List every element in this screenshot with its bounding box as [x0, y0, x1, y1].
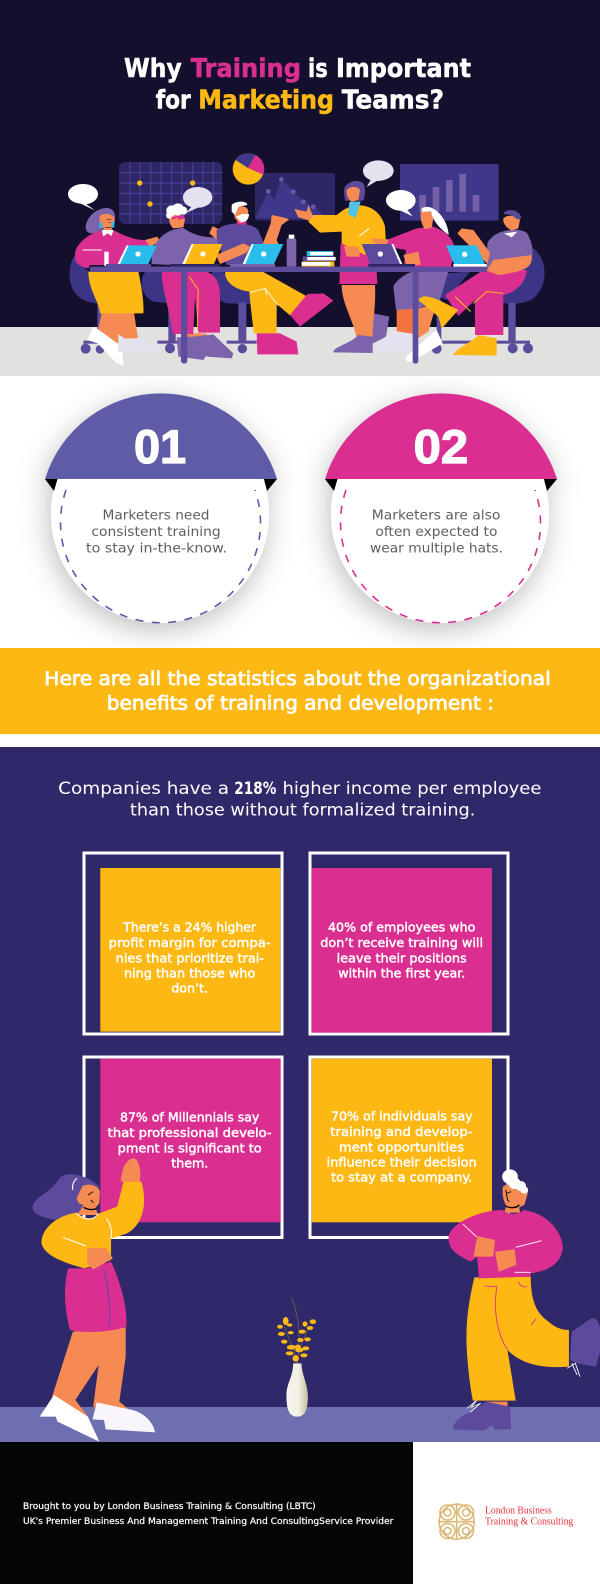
text: point 01: Marketers need	[102, 508, 210, 523]
stat card: 40% of employees: within the first year.	[338, 966, 465, 981]
text: point 02	[370, 508, 503, 557]
panel: header background	[0, 0, 600, 328]
card shadow and body	[45, 393, 277, 623]
banner: Here are all the statistics about the organizational	[44, 669, 551, 690]
panel: point 02	[325, 393, 557, 623]
pie chart	[233, 153, 264, 185]
person: standing presenter in yellow	[294, 181, 389, 353]
intro statement: higher income per employee	[282, 779, 541, 798]
logo: company name: Training & Consulting	[485, 1516, 573, 1528]
logo: company name: London Business	[485, 1505, 552, 1516]
laptops	[106, 244, 487, 267]
stat card: 70% of individuals	[310, 1057, 508, 1238]
title: Marketing	[198, 85, 334, 115]
chart screen: mountain line	[255, 173, 335, 220]
text: point 02: often expected to	[375, 525, 497, 540]
stat card: 87% of Millennials	[84, 1057, 282, 1238]
title: for	[156, 85, 191, 115]
stat card: 70% of individuals: to stay at a company.	[331, 1170, 472, 1185]
meeting table	[90, 267, 487, 364]
stat card: 87% of Millennials: pment is significant to	[118, 1140, 262, 1155]
footer: white logo panel	[413, 1442, 600, 1584]
footer credit text: Brought to you by London Business Training & Consulting (LBTC)	[23, 1501, 316, 1511]
text: point 02: wear multiple hats.	[370, 542, 503, 557]
text: point 01	[86, 508, 227, 557]
stat card: 40% of employees	[310, 853, 508, 1034]
vase with yellow plant	[277, 1298, 316, 1417]
stat card: 87% of Millennials: them.	[171, 1155, 208, 1170]
footer credit text	[23, 1501, 394, 1526]
stat card: 70% of individuals: influence their decision	[327, 1154, 477, 1169]
text: point 02: Marketers are also	[372, 508, 500, 523]
fold corners	[45, 479, 277, 491]
footer: black credit panel	[0, 1442, 413, 1584]
stat card: 24% profit margin: nies that prioritize trai-	[116, 950, 264, 965]
stat card: 40% of employees: leave their positions	[337, 950, 467, 965]
stat card: 87% of Millennials: 87% of Millennials say	[120, 1110, 259, 1125]
intro statement: Companies have a	[58, 779, 229, 798]
panel: statistics background	[0, 747, 600, 1442]
banner	[0, 648, 600, 734]
intro statement: 218%	[234, 779, 276, 798]
logo: knot emblem	[438, 1503, 475, 1540]
fold corners	[325, 479, 557, 491]
band: white gap behind banner	[0, 648, 600, 747]
title: Training	[191, 54, 301, 84]
speech bubbles	[68, 160, 416, 216]
floor strip	[0, 327, 600, 376]
illustration: marketing team meeting	[68, 153, 545, 365]
person: woman with white hair	[370, 207, 455, 362]
title: Why	[124, 54, 182, 84]
dashed ring	[340, 490, 540, 623]
stat card: 24% profit margin: don’t.	[171, 981, 208, 996]
logo: company name	[485, 1505, 573, 1528]
woman pointing up	[32, 1158, 155, 1442]
text: point 01: consistent training	[91, 525, 221, 540]
chart screen: bar chart	[400, 164, 499, 221]
stat card: 40% of employees: 40% of employees who	[328, 920, 475, 935]
number 02: 02	[414, 420, 468, 473]
panel: point 01	[45, 393, 277, 623]
intro statement	[58, 779, 541, 820]
title: is	[308, 54, 328, 84]
dashed ring	[60, 490, 260, 623]
stat card: 24% profit margin: There’s a 24% higher	[122, 920, 257, 935]
number 01: 01	[134, 420, 186, 473]
floor band	[0, 1407, 600, 1442]
text: point 01: to stay in-the-know.	[86, 542, 227, 557]
person: bearded man with purple top and yellow trousers	[216, 202, 333, 354]
chart screen: scatter grid	[119, 162, 222, 224]
banner: benefits of training and development :	[107, 693, 494, 714]
stat card: 24% profit margin	[84, 853, 282, 1034]
stat card: 87% of Millennials: that professional develo-	[108, 1125, 272, 1140]
stat card: 70% of individuals: training and develop-	[330, 1124, 473, 1139]
person: woman with pink top and yellow skirt	[75, 208, 160, 365]
footer credit text: UK's Premier Business And Management Training And ConsultingService Provider	[23, 1516, 394, 1526]
woman with white hair, walking	[449, 1169, 600, 1431]
title: Teams?	[342, 85, 444, 115]
person: older woman with lavender top and pink trousers	[152, 203, 233, 360]
stat card: 24% profit margin: ning than those who	[124, 966, 255, 981]
title: Important	[336, 54, 471, 84]
stat card: 40% of employees: don’t receive training will	[320, 935, 483, 950]
stat card: 70% of individuals: ment opportunities	[339, 1139, 464, 1154]
chairs	[70, 248, 545, 354]
water bottle	[287, 235, 296, 267]
illustration: bottom scene	[32, 1158, 600, 1442]
title	[124, 54, 471, 115]
person: man with lavender top and pink trousers	[418, 210, 533, 356]
card shadow and body	[325, 393, 557, 623]
stat card: 70% of individuals: 70% of individuals say	[331, 1109, 473, 1124]
intro statement: than those without formalized training.	[130, 801, 475, 820]
stack of books	[302, 251, 336, 267]
stat card: 24% profit margin: profit margin for compa-	[109, 935, 271, 950]
